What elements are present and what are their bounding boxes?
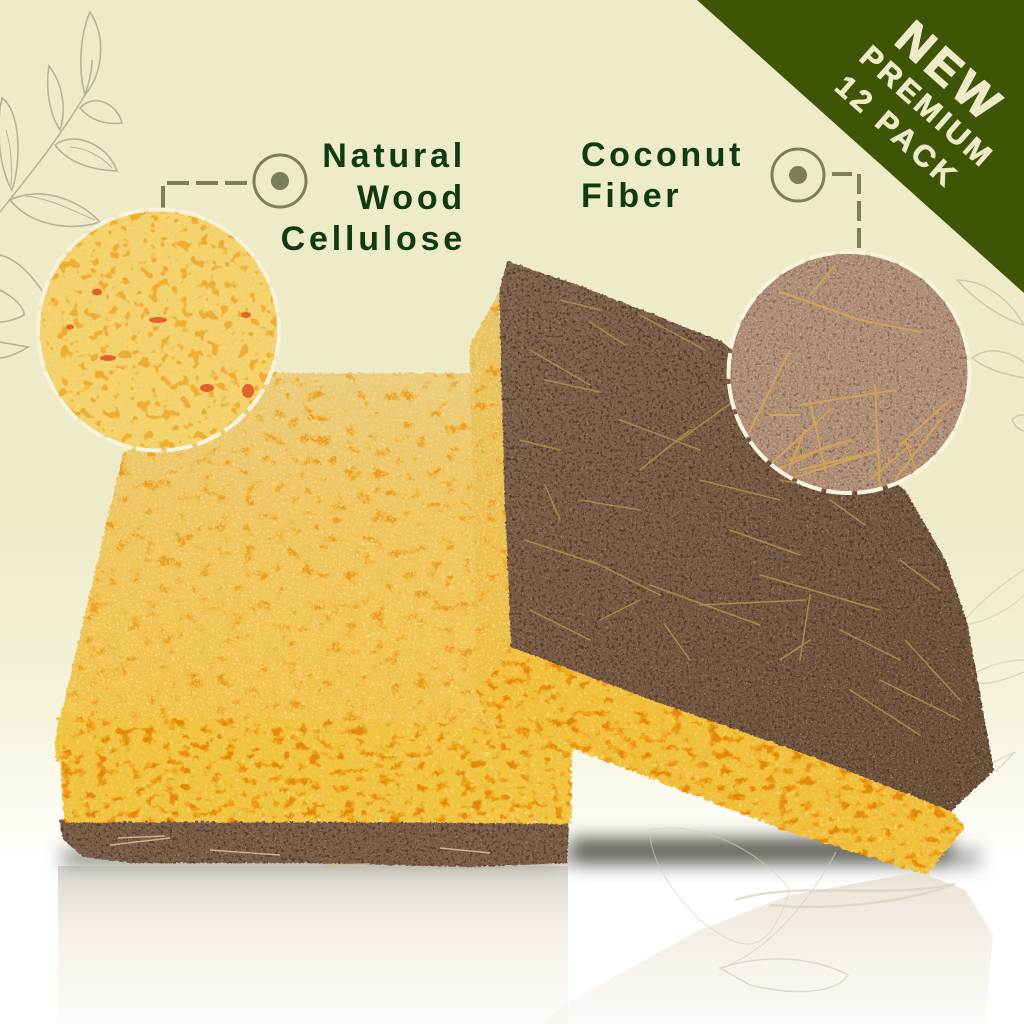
right sponge underside — [474, 640, 962, 873]
floor shadow — [62, 838, 980, 866]
left sponge — [53, 372, 570, 866]
orange red pores — [66, 288, 254, 398]
left sponge base straws — [110, 836, 490, 865]
magnified straws — [745, 265, 950, 490]
marker ring — [772, 149, 824, 201]
marker dot — [271, 172, 289, 190]
left sponge yellow top — [53, 372, 570, 760]
magnified circle: cellulose — [36, 208, 281, 452]
banner text: premium: PREMIUM — [853, 40, 1000, 175]
heading: coconut fiber — [581, 136, 744, 215]
right sponge — [468, 260, 993, 873]
dashed ring — [728, 252, 970, 493]
banner text: new: NEW — [886, 10, 1015, 133]
heading: coconut fiber: Fiber — [581, 177, 682, 215]
callout: natural wood cellulose connector — [163, 155, 306, 208]
callout: coconut fiber connector — [772, 149, 859, 250]
heading: natural wood cellulose — [281, 137, 466, 258]
dashed ring — [38, 210, 279, 450]
right sponge left edge — [468, 290, 510, 692]
marker dot — [789, 166, 807, 184]
right sponge coconut fiber face — [498, 260, 993, 810]
reflected leaf outline — [650, 828, 955, 992]
heading: natural wood cellulose: Wood — [357, 179, 466, 217]
magnified circle: coconut fiber — [726, 250, 972, 495]
left sponge front face — [55, 715, 570, 822]
sponge reflections — [58, 866, 993, 1024]
banner text: 12 pack: 12 PACK — [829, 69, 965, 195]
decorative leaves: right side — [950, 280, 1024, 772]
heading: natural wood cellulose: Natural — [322, 137, 466, 175]
heading: coconut fiber: Coconut — [581, 136, 744, 174]
left sponge brown fiber base — [58, 818, 568, 866]
coconut straws — [520, 300, 960, 735]
decorative leaves: upper left — [0, 12, 122, 358]
corner banner — [697, 0, 1024, 293]
heading: natural wood cellulose: Cellulose — [281, 220, 466, 258]
marker ring — [254, 155, 306, 207]
